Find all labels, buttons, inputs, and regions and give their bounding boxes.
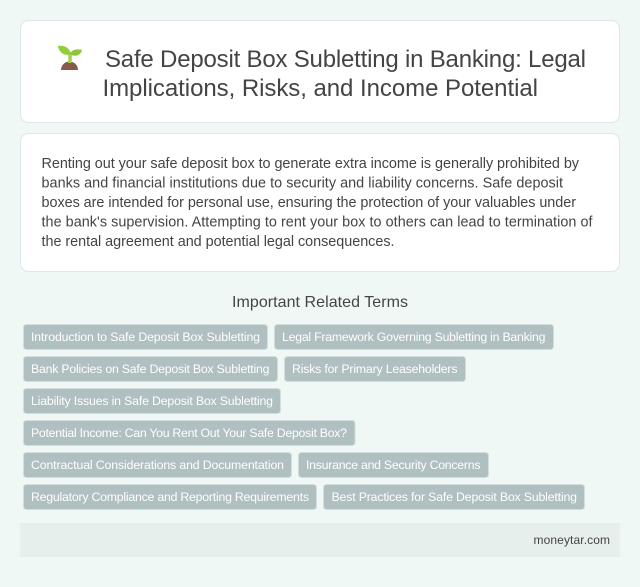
tag: risks: Risks for Primary Leaseholders [292, 362, 458, 376]
tag: regulatory [24, 484, 316, 510]
title: Implications, Risks, and Income Potential [102, 75, 538, 102]
tag: potential income: Potential Income: Can You Rent Out Your Safe Deposit Box? [31, 426, 347, 440]
description text: the bank's supervision. Attempting to rent your box to others can lead to termination of [42, 214, 594, 230]
tag: contractual [24, 452, 292, 478]
title: Safe Deposit Box Subletting in Banking: Legal [105, 46, 586, 73]
tag: bank policies [24, 356, 278, 382]
description text [42, 156, 594, 250]
description text: Renting out your safe deposit box to generate extra income is generally prohibited by [42, 156, 580, 172]
tag: legal framework: Legal Framework Governing Subletting in Banking [282, 330, 546, 344]
tag: risks [284, 356, 466, 382]
footer [20, 523, 620, 557]
tag: liability [24, 388, 280, 414]
tag: liability: Liability Issues in Safe Deposit Box Subletting [31, 394, 273, 408]
tag: contractual: Contractual Considerations and Documentation [31, 458, 284, 472]
tag: introduction: Introduction to Safe Deposit Box Subletting [31, 330, 260, 344]
tag: potential income [24, 420, 355, 446]
tag: best practices: Best Practices for Safe Deposit Box Subletting [332, 490, 577, 504]
tag: insurance: Insurance and Security Concerns [306, 458, 480, 472]
description text: the rental agreement and potential legal consequences. [42, 234, 394, 250]
title [102, 46, 586, 102]
heading: important related terms: Important Related Terms [232, 294, 408, 311]
panel: description card [20, 134, 620, 272]
tag: best practices [324, 484, 584, 510]
panel: title card [20, 20, 620, 122]
tag: legal framework [274, 324, 554, 350]
panel: related terms tags [24, 324, 584, 510]
tag: bank policies: Bank Policies on Safe Deposit Box Subletting [31, 362, 270, 376]
description text: boxes are intended for personal use, ensuring the protection of your valuables under [42, 195, 576, 211]
tag: introduction [24, 324, 268, 350]
description text: banks and financial institutions due to security and liability concerns. Safe deposit [42, 176, 563, 192]
tag: insurance [298, 452, 488, 478]
icon: sprout [58, 46, 82, 70]
tag: regulatory: Regulatory Compliance and Reporting Requirements [31, 490, 309, 504]
footer source text: moneytar.com [534, 533, 610, 547]
